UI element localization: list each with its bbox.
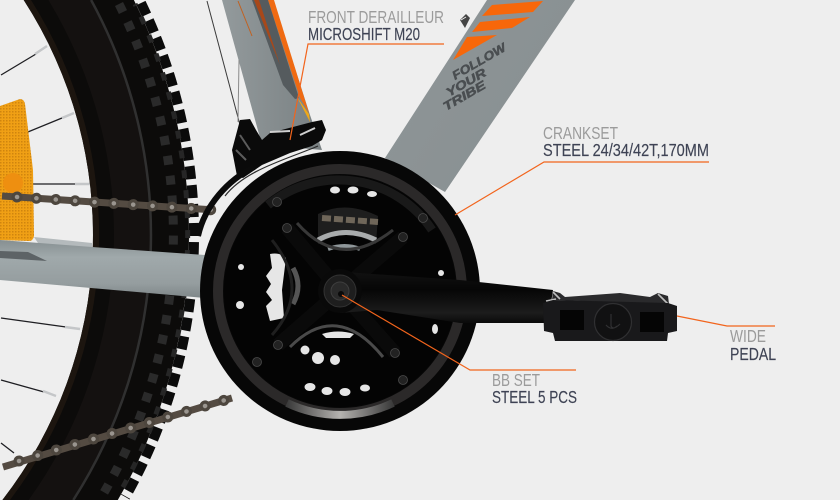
- orange graphic stripes: [453, 1, 543, 60]
- brake and shift cables: [207, 1, 240, 125]
- spider arms: [278, 228, 403, 353]
- frame lettering: TRIBE: [440, 77, 489, 114]
- reflector: [0, 99, 34, 241]
- chainring windows: [236, 186, 444, 396]
- lower chain: [3, 398, 232, 467]
- pedal cut-outs: [560, 310, 584, 330]
- bottom bracket bolt: [324, 275, 356, 307]
- chainguard ring: [200, 151, 480, 431]
- rear wheel spokes: [1, 46, 90, 453]
- cable stop bolt: [460, 14, 470, 28]
- silver ring arcs: [318, 232, 376, 240]
- down tube: [385, 0, 575, 192]
- rear tyre: [2, 0, 194, 500]
- crank arm: [318, 269, 553, 323]
- callout: bottom bracket: BB SET: [492, 370, 540, 390]
- frame lettering: FOLLOW: [450, 40, 510, 83]
- callout: front derailleur: FRONT DERAILLEUR: [308, 7, 444, 27]
- upper window: [318, 207, 378, 244]
- chainstay tube: [0, 237, 205, 298]
- callout: front derailleur: [290, 7, 444, 140]
- callout: pedal: PEDAL: [730, 344, 776, 364]
- visible chain inside: [322, 218, 378, 222]
- frame lettering: [440, 40, 510, 114]
- callout: bottom bracket: STEEL 5 PCS: [492, 387, 577, 407]
- seat tube: [222, 0, 322, 150]
- pedal: [543, 291, 677, 341]
- frame lettering: YOUR: [444, 65, 489, 100]
- inner chainring arc: [293, 268, 298, 304]
- callout: pedal: [677, 316, 776, 364]
- chainring bolts: [252, 198, 428, 384]
- callout: pedal: WIDE: [730, 326, 766, 346]
- callout: crankset: STEEL 24/34/42T,170MM: [543, 140, 709, 160]
- callout: front derailleur: MICROSHIFT M20: [308, 24, 420, 44]
- front derailleur: [198, 119, 326, 236]
- callout: crankset: [455, 123, 709, 215]
- crankset: [200, 151, 480, 431]
- upper chain: [2, 196, 215, 210]
- pedal cap: [594, 304, 632, 340]
- callout: crankset: CRANKSET: [543, 123, 618, 143]
- callout: bottom bracket: [342, 295, 577, 407]
